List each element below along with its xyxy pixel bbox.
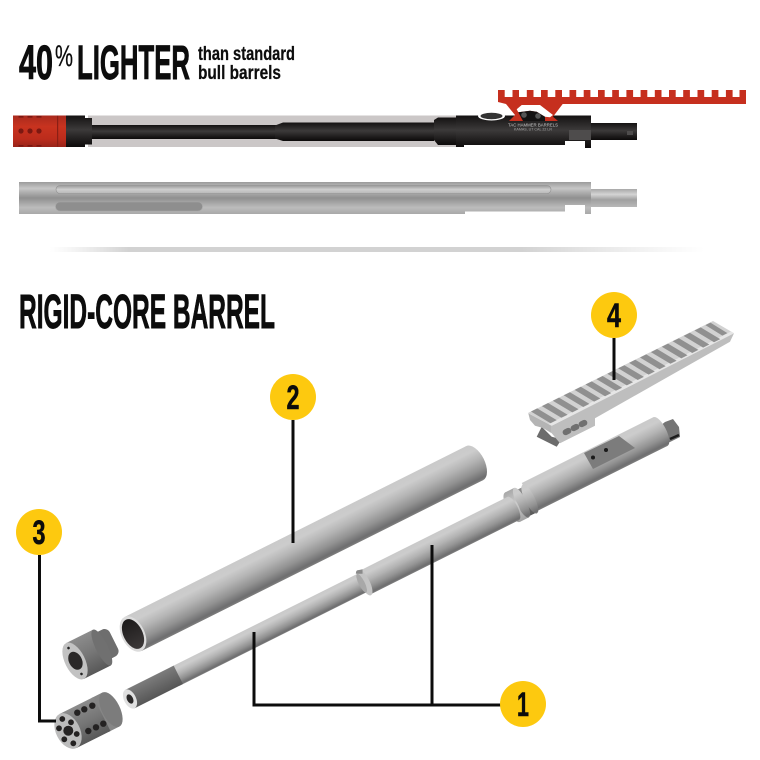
brake rear section <box>92 693 119 732</box>
part 3: thread protector <box>57 623 123 683</box>
part 4: scope rail, exploded view <box>528 321 734 447</box>
receiver body <box>456 116 591 148</box>
barrel collar <box>434 118 456 145</box>
leader lines <box>40 338 614 721</box>
badge 3: 3 <box>32 514 46 552</box>
rail grooves <box>531 323 727 423</box>
heading: 40% lighter: LIGHTER <box>77 37 190 90</box>
heading: Rigid-Core Barrel: RIGID-CORE BARREL <box>19 286 275 339</box>
heading: 40% lighter: 40 <box>19 37 53 90</box>
lower flute <box>56 202 202 211</box>
receiver tail <box>590 123 637 140</box>
rear collar groove <box>515 486 538 517</box>
receiver engraving: KAMAS, UT CAL 22 LR <box>514 128 552 132</box>
badge 2: 2 <box>286 379 300 417</box>
rail slots <box>562 419 588 436</box>
protector body <box>66 630 111 679</box>
red muzzle brake <box>13 116 66 147</box>
upper flute <box>56 186 551 194</box>
part 3: muzzle brake <box>49 689 127 753</box>
receiver screw holes <box>591 448 608 460</box>
thick barrel <box>359 497 519 594</box>
rail end face <box>528 413 552 433</box>
tube far end <box>457 442 492 485</box>
bull barrel silhouette behind <box>88 116 458 147</box>
barrel tail <box>590 189 637 207</box>
heading: 40% lighter: bull barrels <box>198 63 281 84</box>
rail top surface <box>528 321 734 426</box>
receiver flat <box>584 436 635 469</box>
tube body <box>125 446 483 651</box>
receiver engraving: TAC HAMMER BARRELS <box>508 122 558 128</box>
protector face <box>57 639 93 683</box>
thin barrel <box>170 574 366 686</box>
brake face <box>49 709 87 753</box>
receiver tail stub <box>655 419 680 445</box>
front collar <box>354 568 376 597</box>
logo badge <box>478 112 505 120</box>
badge 2 <box>270 374 316 420</box>
solid bull barrel, side view <box>19 182 637 214</box>
badge 4: 4 <box>607 297 621 335</box>
barrel thin section <box>92 125 278 139</box>
part 2: carbon sleeve tube <box>114 442 492 656</box>
barrel body <box>19 182 591 214</box>
heading: 40% lighter: than standard <box>198 44 295 65</box>
badge 4 <box>591 292 637 338</box>
protector neck <box>93 627 121 661</box>
rail side wall <box>552 333 734 443</box>
badge 1 <box>500 681 546 727</box>
badge 3 <box>16 509 62 555</box>
brake ports <box>56 702 107 746</box>
black and red Rigid-Core barrel, side view <box>13 90 746 148</box>
tube opening <box>117 615 149 653</box>
receiver section <box>522 417 668 512</box>
rail mount foot <box>537 427 562 447</box>
section divider <box>50 247 705 252</box>
muzzle collar <box>66 116 92 147</box>
rear collar ring <box>500 486 533 525</box>
rail front tips <box>548 332 734 426</box>
heading: 40% lighter: % <box>55 40 73 73</box>
receiver block <box>569 130 591 140</box>
receiver engraving <box>508 122 558 132</box>
brake body <box>60 697 110 748</box>
part 1: rigid core barrel <box>117 415 674 716</box>
red scope rail <box>498 90 746 121</box>
badge 1: 1 <box>517 686 529 724</box>
barrel thick section <box>275 122 434 141</box>
threaded end <box>125 666 183 708</box>
tube opening rim <box>114 612 152 656</box>
